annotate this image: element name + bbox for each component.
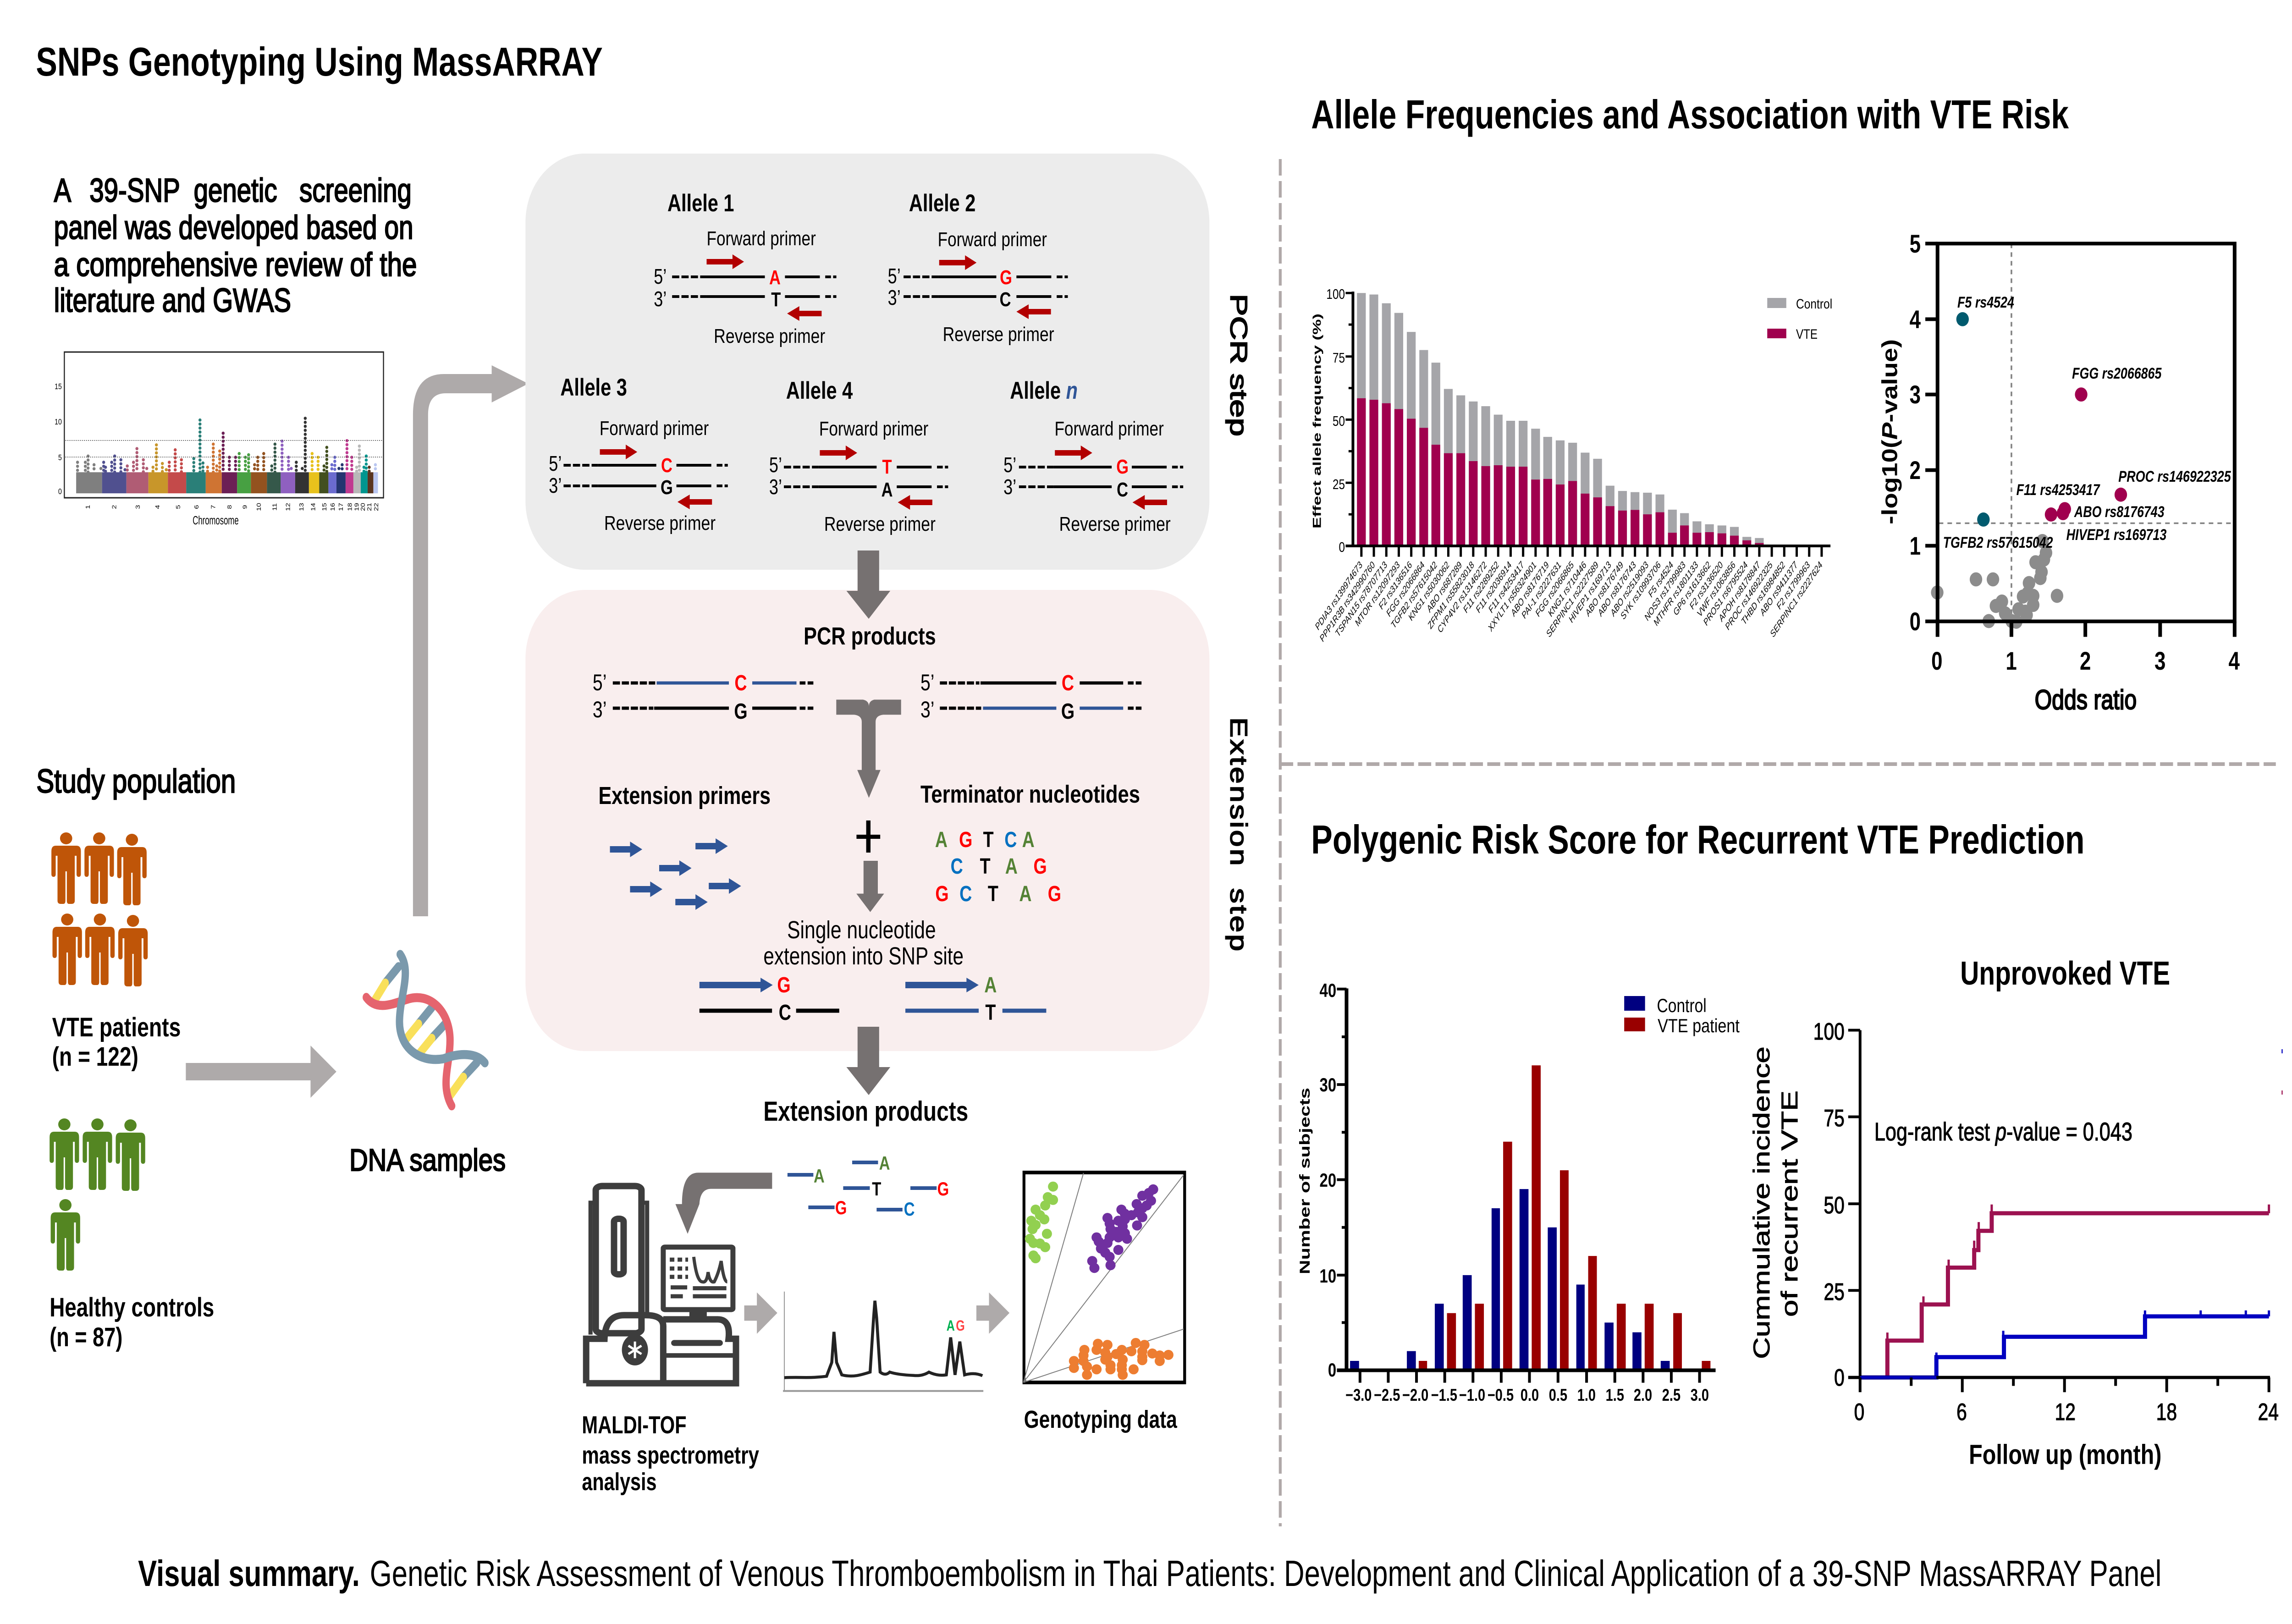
chart: effect allele frequency stacked bars: GP6 rs1613662: [1671, 559, 1713, 617]
chart: effect allele frequency stacked bars: ABO rs8176743: [1596, 559, 1638, 618]
footer caption: Visual summary.: [138, 1553, 360, 1594]
allele n diagram: 5’: [1003, 453, 1016, 477]
chart: mass spectrum: [783, 1292, 983, 1392]
allele 1 diagram: A: [769, 266, 781, 289]
chart: PRS histogram: −1.0: [1459, 1386, 1485, 1405]
allele 3 diagram: Reverse primer: [604, 512, 716, 534]
chart: cumulative incidence unprovoked VTE: 50: [1824, 1192, 1845, 1218]
chart: effect allele frequency stacked bars: TSPAN15 rs78707713: [1333, 559, 1389, 639]
allele 3 diagram: 3’: [549, 474, 562, 497]
allele 2 diagram: G: [1000, 266, 1012, 289]
chart: cumulative incidence unprovoked VTE: 0: [1834, 1364, 1845, 1391]
allele 1 diagram: Reverse primer: [714, 325, 825, 347]
allele 4 diagram: [769, 377, 948, 535]
icon: plus: [856, 820, 880, 853]
text block: panel description: panel was developed based on: [54, 209, 413, 246]
arrow: extension step to products: [846, 1027, 890, 1095]
chart: PRS histogram: 0.5: [1549, 1386, 1567, 1405]
chart: effect allele frequency stacked bars: MTOR rs12097293: [1353, 559, 1402, 628]
chart: volcano plot: PROC rs146922325: [2118, 468, 2231, 485]
chart: effect allele frequency stacked bars: KNG1 rs5030062: [1406, 559, 1451, 622]
chart: Manhattan plot: 5: [175, 505, 182, 509]
extension product fragments: G: [835, 1197, 847, 1218]
chart: volcano plot: HIVEP1 rs169713: [2066, 526, 2166, 544]
extension product fragments: A: [814, 1165, 825, 1187]
chart: volcano plot: 4: [2229, 646, 2240, 675]
terminator nucleotide letters: C: [959, 882, 972, 906]
chart: PRS histogram: 1.5: [1606, 1386, 1624, 1405]
chart: PRS histogram: 3.0: [1691, 1386, 1709, 1405]
allele 2 diagram: Forward primer: [938, 228, 1047, 251]
arrow: merge PCR products: [836, 699, 901, 798]
allele 2 diagram: C: [1000, 288, 1011, 311]
allele 4 diagram: 3’: [769, 475, 782, 499]
allele n diagram: 3’: [1003, 475, 1016, 499]
chart: volcano plot: 3: [2154, 646, 2165, 675]
terminator nucleotide letters: A: [1019, 882, 1032, 906]
extension strands: A: [984, 973, 997, 997]
chart: PRS histogram: 20: [1320, 1169, 1336, 1191]
allele 4 diagram: T: [882, 456, 892, 478]
chart: Manhattan plot: 8: [226, 505, 233, 509]
chart: effect allele frequency stacked bars: SERPINC1 rs2227589: [1544, 559, 1600, 639]
chart: Manhattan plot: 17: [338, 503, 344, 511]
allele 4 diagram: Reverse primer: [824, 513, 936, 535]
chart: PRS histogram: −2.5: [1374, 1386, 1400, 1405]
chart: Manhattan plot: 14: [310, 503, 317, 511]
chart: effect allele frequency stacked bars: PROS1 rs6795524: [1702, 560, 1749, 628]
divider: vertical dashed: [1278, 159, 1282, 1526]
chart: cumulative incidence unprovoked VTE: 0: [1854, 1398, 1864, 1425]
legend: histogram: [1624, 995, 1740, 1036]
PCR product strands left: 5’: [593, 669, 606, 695]
chart: Manhattan plot: 16: [330, 503, 336, 511]
chart: effect allele frequency stacked bars: KNG1 rs710446: [1546, 559, 1588, 619]
chart: Manhattan plot: [55, 352, 384, 527]
arrow: spectrum to genotyping data: [976, 1293, 1009, 1334]
legend: allele frequency: [1767, 296, 1832, 342]
title: SNPs Genotyping Using MassARRAY: SNPs Genotyping Using MassARRAY: [36, 39, 603, 84]
chart: PRS histogram: −0.5: [1488, 1386, 1514, 1405]
chart: PRS histogram: Number of subjects: [1296, 1088, 1313, 1274]
chart: volcano plot: Odds ratio: [2035, 685, 2137, 715]
allele 2 diagram: 5’: [888, 264, 901, 288]
chart: volcano plot: 4: [1910, 305, 1921, 334]
label: Extension step: Extension step: [1225, 717, 1252, 951]
PCR product strands left: [593, 669, 815, 724]
chart: effect allele frequency stacked bars: TGFB2 rs57615042: [1389, 559, 1439, 630]
chart: effect allele frequency stacked bars: F11 rs2289252: [1461, 559, 1501, 615]
chart: Manhattan plot: 2: [111, 505, 118, 509]
terminator nucleotide letters: A: [1022, 828, 1035, 852]
text block: healthy controls: (n = 87): [50, 1323, 122, 1352]
chart: Manhattan plot: 19: [354, 503, 360, 511]
chart: effect allele frequency stacked bars: ABO rs8176749: [1583, 559, 1625, 618]
arrow: instrument to spectrum: [744, 1293, 777, 1334]
text block: MALDI-TOF: analysis: [582, 1468, 656, 1496]
chart: PRS histogram: [1296, 980, 1740, 1405]
chart: effect allele frequency stacked bars: F2 rs3136516: [1377, 559, 1414, 611]
icon: healthy controls people: [50, 1118, 145, 1271]
allele n diagram: Forward primer: [1054, 418, 1164, 440]
extension product fragments: G: [937, 1178, 949, 1200]
chart: Manhattan plot: 20: [360, 503, 366, 511]
terminator nucleotide letters: G: [1048, 882, 1061, 906]
chart title: Unprovoked VTE: Unprovoked VTE: [1960, 954, 2170, 992]
allele 2 diagram: [888, 190, 1068, 346]
text block: single nucleotide extension: [763, 916, 964, 970]
heading: extension primers: Extension primers: [598, 782, 771, 809]
PCR product strands left: C: [734, 671, 747, 695]
chart: effect allele frequency stacked bars: F2 rs3136520: [1688, 559, 1725, 611]
chart: cumulative incidence unprovoked VTE: 25: [1824, 1278, 1845, 1305]
allele 1 diagram: 3’: [654, 287, 667, 311]
chart: volcano plot: 3: [1910, 380, 1921, 409]
PCR product strands left: G: [734, 699, 748, 724]
chart: effect allele frequency stacked bars: XXYLT1 rs56324901: [1486, 560, 1538, 634]
chart: effect allele frequency stacked bars: F5 rs4524: [1647, 560, 1675, 599]
PCR product strands right: 5’: [920, 669, 934, 695]
extension strands: C: [779, 1001, 791, 1025]
allele 2 diagram: Reverse primer: [943, 323, 1054, 346]
chart: effect allele frequency stacked bars: PROC rs146922325: [1723, 559, 1774, 632]
chart: effect allele frequency stacked bars: FGG rs2066864: [1384, 560, 1426, 619]
text block: MALDI-TOF: MALDI-TOF: [582, 1411, 687, 1439]
text block: MALDI-TOF: mass spectrometry: [582, 1442, 759, 1469]
chart: PRS histogram: −2.0: [1402, 1386, 1428, 1405]
chart: effect allele frequency stacked bars: MTHFR rs1801133: [1652, 559, 1700, 628]
chart: effect allele frequency stacked bars: THBD rs16984852: [1740, 559, 1787, 627]
chart: mass spectrum: G: [956, 1318, 965, 1334]
chart: Manhattan plot: 12: [285, 503, 292, 511]
chart: cumulative incidence unprovoked VTE: 24: [2258, 1398, 2279, 1425]
allele 3 diagram: G: [661, 476, 673, 499]
chart: cumulative incidence unprovoked VTE: 18: [2156, 1398, 2177, 1425]
extension product fragments: A: [879, 1152, 890, 1174]
chart: PRS histogram: 30: [1320, 1074, 1336, 1096]
chart: Manhattan plot: 15: [55, 382, 62, 391]
chart: Manhattan plot: 18: [347, 503, 353, 511]
chart: PRS histogram: 40: [1320, 980, 1336, 1001]
legend: histogram: VTE patient: [1658, 1015, 1740, 1036]
chart: Manhattan plot: 6: [193, 505, 200, 509]
PCR product strands left: 3’: [593, 696, 606, 722]
arrow: extension products to MALDI-TOF: [675, 1173, 772, 1234]
text block: healthy controls: [50, 1293, 214, 1352]
chart: Manhattan plot: 9: [242, 505, 248, 509]
chart: effect allele frequency stacked bars: ABO rs8176719: [1509, 559, 1551, 618]
chart: PRS histogram: 1.0: [1577, 1386, 1596, 1405]
allele 1 diagram: Allele 1: [667, 190, 734, 217]
chart: cumulative incidence unprovoked VTE: 75: [1824, 1105, 1845, 1131]
text block: panel description: genetic: [194, 171, 277, 209]
arrow: DNA samples to PCR step: [413, 365, 529, 916]
allele 1 diagram: 5’: [654, 265, 667, 288]
allele 1 diagram: T: [771, 288, 781, 311]
chart: effect allele frequency stacked bars: ABO rs9411377: [1758, 559, 1800, 618]
allele n diagram: Allele n: [1010, 377, 1078, 404]
text block: panel description: [54, 171, 417, 319]
terminator nucleotide letters: T: [988, 882, 998, 906]
chart: volcano plot: F11 rs4253417: [2017, 481, 2100, 499]
text block: panel description: a comprehensive review of the: [54, 246, 417, 283]
chart: effect allele frequency stacked bars: ABO rs2519093: [1609, 559, 1650, 618]
chart: mass spectrum: A: [947, 1318, 955, 1334]
chart: effect allele frequency stacked bars: ZFPM1 rs55823018: [1426, 559, 1476, 631]
PCR product strands right: G: [1061, 699, 1074, 724]
chart: volcano plot: 2: [2080, 646, 2091, 675]
chart: effect allele frequency stacked bars: F11 rs2036914: [1474, 560, 1513, 615]
icon: DNA helix: [366, 954, 485, 1106]
chart: volcano plot: 5: [1910, 229, 1921, 258]
chart: volcano plot: 0: [1931, 646, 1943, 675]
icon: MALDI-TOF instrument: [586, 1186, 736, 1383]
allele 3 diagram: Forward primer: [600, 417, 709, 440]
chart: Manhattan plot: 4: [155, 505, 161, 509]
PCR product strands right: 3’: [920, 696, 934, 722]
chart: Manhattan plot: 10: [256, 503, 263, 511]
text block: panel description: A: [54, 171, 72, 209]
chart: effect allele frequency stacked bars: PAI-1 rs2227631: [1520, 560, 1563, 621]
chart: effect allele frequency stacked bars: HIVEP1 rs169713: [1567, 559, 1613, 625]
chart: Manhattan plot: 7: [210, 505, 217, 509]
allele 3 diagram: 5’: [549, 452, 562, 475]
text block: panel description: literature and GWAS: [54, 281, 291, 319]
heading: polygenic risk score: Polygenic Risk Score for Recurrent VTE Prediction: [1311, 817, 2085, 862]
allele n diagram: Reverse primer: [1059, 513, 1171, 535]
allele n diagram: G: [1116, 456, 1129, 478]
chart: effect allele frequency stacked bars: 50: [1333, 413, 1345, 429]
chart: effect allele frequency stacked bars: SERPINC1 rs2227624: [1769, 560, 1824, 639]
chart: effect allele frequency stacked bars: ABO rs687289: [1425, 559, 1464, 615]
chart: PRS histogram: −3.0: [1345, 1386, 1372, 1405]
allele 2 diagram: Allele 2: [909, 190, 975, 217]
chart: effect allele frequency stacked bars: CYP4V2 rs13146272: [1436, 559, 1488, 635]
text block: single nucleotide extension: Single nucleotide: [787, 916, 936, 944]
text block: VTE patients: VTE patients: [52, 1013, 181, 1042]
allele 3 diagram: Allele 3: [560, 374, 627, 401]
chart: effect allele frequency stacked bars: VWF rs1063856: [1695, 559, 1737, 619]
chart: cumulative incidence unprovoked VTE: Follow up (month): [1969, 1440, 2161, 1470]
allele 1 diagram: Forward primer: [706, 227, 816, 250]
terminator nucleotide letters: G: [935, 882, 949, 906]
allele 2 diagram: 3’: [888, 286, 901, 309]
chart: genotyping cluster plot: [1024, 1173, 1185, 1382]
chart: cumulative incidence unprovoked VTE: of recurrent VTE: [1777, 1090, 1802, 1317]
text block: DNA samples: DNA samples: [349, 1143, 506, 1177]
extension strands: G: [777, 973, 791, 997]
chart: Manhattan plot: Chromosome: [193, 514, 239, 527]
chart: volcano plot: -log10(P-value): [1878, 339, 1902, 524]
allele 4 diagram: A: [882, 479, 893, 501]
legend: allele frequency: Control: [1796, 296, 1832, 312]
PCR product strands right: C: [1062, 671, 1074, 695]
panel: Extension step: [525, 590, 1209, 1051]
chart: effect allele frequency stacked bars: [1311, 286, 1832, 644]
chart: volcano plot: FGG rs2066865: [2072, 365, 2162, 382]
PCR product strands right: [920, 669, 1143, 724]
heading: study population: Study population: [36, 762, 236, 800]
allele 3 diagram: C: [661, 454, 672, 477]
chart: PRS histogram: 2.0: [1634, 1386, 1652, 1405]
chart: effect allele frequency stacked bars: 0: [1339, 539, 1345, 555]
chart: PRS histogram: 10: [1320, 1265, 1336, 1287]
legend: allele frequency: VTE: [1796, 326, 1818, 342]
footer caption: Genetic Risk Assessment of Venous Thromboembolism in Thai Patients: Development and Clinical Application of a 39-SNP MassARRAY Panel: [370, 1553, 2161, 1594]
divider: horizontal dashed: [1280, 762, 2276, 766]
extension strands: [700, 973, 1046, 1025]
chart: Manhattan plot: 5: [58, 453, 62, 462]
text block: single nucleotide extension: extension into SNP site: [763, 942, 964, 970]
text block: genotyping data: Genotyping data: [1024, 1406, 1178, 1433]
terminator nucleotide letters: A: [935, 828, 948, 852]
chart: volcano plot: ABO rs8176743: [2074, 503, 2165, 521]
terminator nucleotide letters: C: [1004, 828, 1017, 852]
chart: Manhattan plot: 21: [366, 503, 373, 511]
chart: effect allele frequency stacked bars: FGG rs2066865: [1534, 559, 1576, 619]
allele 4 diagram: Forward primer: [819, 418, 928, 440]
chart: effect allele frequency stacked bars: 75: [1333, 350, 1345, 366]
chart: Manhattan plot: 11: [272, 503, 278, 511]
terminator nucleotide letters: C: [951, 854, 963, 879]
chart: effect allele frequency stacked bars: 25: [1333, 476, 1345, 492]
terminator nucleotide letters: A: [1005, 854, 1018, 879]
heading: allele frequencies: Allele Frequencies and Association with VTE Risk: [1311, 92, 2069, 137]
panel: PCR step: [525, 154, 1209, 570]
chart: effect allele frequency stacked bars: Effect allele frequency (%): [1311, 314, 1324, 528]
allele 4 diagram: Allele 4: [786, 377, 853, 404]
chart: effect allele frequency stacked bars: 100: [1326, 286, 1345, 302]
chart: cumulative incidence unprovoked VTE: 6: [1956, 1398, 1967, 1425]
text block: healthy controls: Healthy controls: [50, 1293, 214, 1322]
terminator nucleotide letters: T: [980, 854, 991, 879]
allele 1 diagram: [654, 190, 837, 347]
chart: effect allele frequency stacked bars: APOH rs8178847: [1717, 559, 1763, 624]
terminator nucleotide letters: T: [983, 828, 994, 852]
chart: Manhattan plot: 15: [321, 503, 328, 511]
chart: volcano plot: 1: [2006, 646, 2017, 675]
chart: PRS histogram: 0: [1328, 1359, 1336, 1381]
chart: effect allele frequency stacked bars: F2 rs1799963: [1775, 559, 1812, 611]
terminator nucleotide letters: G: [959, 828, 972, 852]
terminator nucleotide letters: G: [1033, 854, 1047, 879]
extension product fragments: [788, 1152, 949, 1220]
heading: PCR products: PCR products: [804, 622, 936, 650]
allele n diagram: [1003, 377, 1183, 535]
text block: panel description: screening: [299, 171, 412, 209]
icon: extension primer arrows: [610, 838, 741, 910]
chart: Manhattan plot: 13: [298, 503, 305, 511]
chart: volcano plot: 2: [1910, 456, 1921, 484]
chart: volcano plot: 0: [1910, 607, 1921, 636]
text block: MALDI-TOF: [582, 1411, 759, 1496]
chart: PRS histogram: 2.5: [1662, 1386, 1680, 1405]
chart: Manhattan plot: 10: [55, 417, 62, 426]
chart: effect allele frequency stacked bars: PDIA3 rs139974673: [1313, 559, 1364, 632]
chart: cumulative incidence unprovoked VTE: 100: [1813, 1018, 1845, 1045]
chart: cumulative incidence unprovoked VTE: Log-rank test p-value = 0.043: [1874, 1117, 2132, 1146]
chart: cumulative incidence unprovoked VTE: [1749, 954, 2283, 1470]
chart: Manhattan plot: 0: [58, 487, 62, 496]
arrow: study population to DNA samples: [186, 1046, 336, 1098]
chart: Manhattan plot: 3: [135, 505, 141, 509]
text block: VTE patients: (n = 122): [52, 1042, 138, 1072]
heading: terminator nucleotides: Terminator nucleotides: [920, 781, 1140, 808]
chart: volcano plot: F5 rs4524: [1957, 294, 2014, 311]
extension product fragments: C: [904, 1198, 915, 1220]
chart: PRS histogram: −1.5: [1431, 1386, 1457, 1405]
heading: extension products: Extension products: [763, 1096, 968, 1127]
icon: VTE patients people: [51, 832, 148, 986]
chart: effect allele frequency stacked bars: F11 rs4253417: [1487, 559, 1526, 615]
allele 3 diagram: [549, 374, 728, 534]
text block: panel description: 39-SNP: [89, 171, 180, 209]
chart: effect allele frequency stacked bars: NOS3 rs1799983: [1642, 559, 1687, 622]
terminator nucleotide letters: [935, 828, 1061, 906]
chart: effect allele frequency stacked bars: SYK rs10993706: [1619, 559, 1663, 622]
chart: volcano plot: 1: [1910, 531, 1921, 560]
label: PCR step: PCR step: [1225, 294, 1252, 436]
chart: cumulative incidence unprovoked VTE: 12: [2055, 1398, 2076, 1425]
chart: volcano plot: TGFB2 rs57615042: [1943, 534, 2053, 551]
text block: VTE patients: [52, 1013, 181, 1072]
allele n diagram: C: [1117, 479, 1128, 501]
chart: PRS histogram: 0.0: [1521, 1386, 1539, 1405]
chart: volcano plot: [1878, 229, 2240, 715]
legend: histogram: Control: [1657, 995, 1707, 1016]
chart: Manhattan plot: 1: [85, 505, 92, 509]
arrow: PCR step to PCR products: [846, 551, 890, 619]
chart: cumulative incidence unprovoked VTE: Cummulative incidence: [1749, 1046, 1774, 1359]
extension product fragments: T: [872, 1178, 881, 1200]
chart: Manhattan plot: 22: [373, 503, 380, 511]
chart: effect allele frequency stacked bars: PPP1R3B rs342990760: [1318, 559, 1377, 644]
allele 4 diagram: 5’: [769, 453, 782, 477]
arrow: to single nucleotide extension: [856, 861, 884, 912]
extension strands: T: [985, 1001, 996, 1025]
